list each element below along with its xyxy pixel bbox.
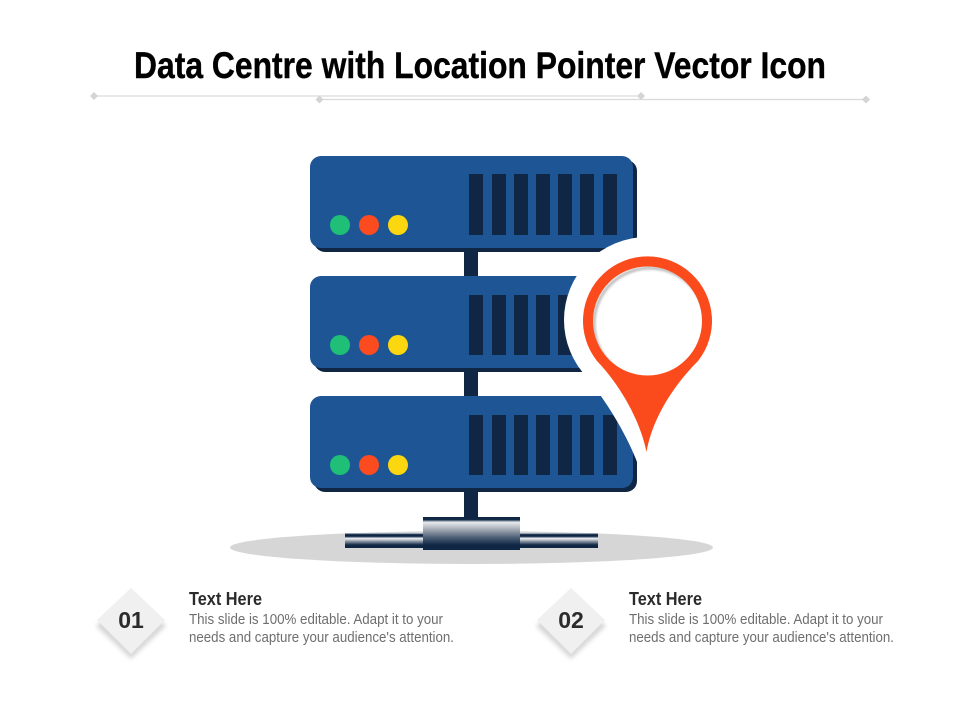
text block 02: needs and capture your audience's attention.	[629, 630, 894, 646]
badge 01: 01	[118, 607, 144, 633]
title underline ornament	[90, 92, 870, 104]
badge 02	[536, 588, 606, 659]
text block 02: Text Here	[629, 589, 702, 609]
server unit 3	[310, 396, 637, 492]
badge 02: 02	[558, 607, 584, 633]
server unit 2	[310, 276, 637, 372]
badge 01	[96, 588, 166, 659]
text block 02: This slide is 100% editable. Adapt it to your	[629, 612, 883, 628]
title: Data Centre with Location Pointer Vector Icon	[134, 45, 826, 86]
ground shadow ellipse	[230, 531, 713, 564]
text block 01: needs and capture your audience's attention.	[189, 630, 454, 646]
text block 01: This slide is 100% editable. Adapt it to your	[189, 612, 443, 628]
text block 02	[629, 589, 894, 646]
icon: location pointer	[583, 256, 712, 452]
server unit 1	[310, 156, 637, 252]
text block 01	[189, 589, 454, 646]
white halo behind location pointer	[564, 237, 735, 476]
text block 01: Text Here	[189, 589, 262, 609]
server rack stand	[345, 240, 598, 550]
